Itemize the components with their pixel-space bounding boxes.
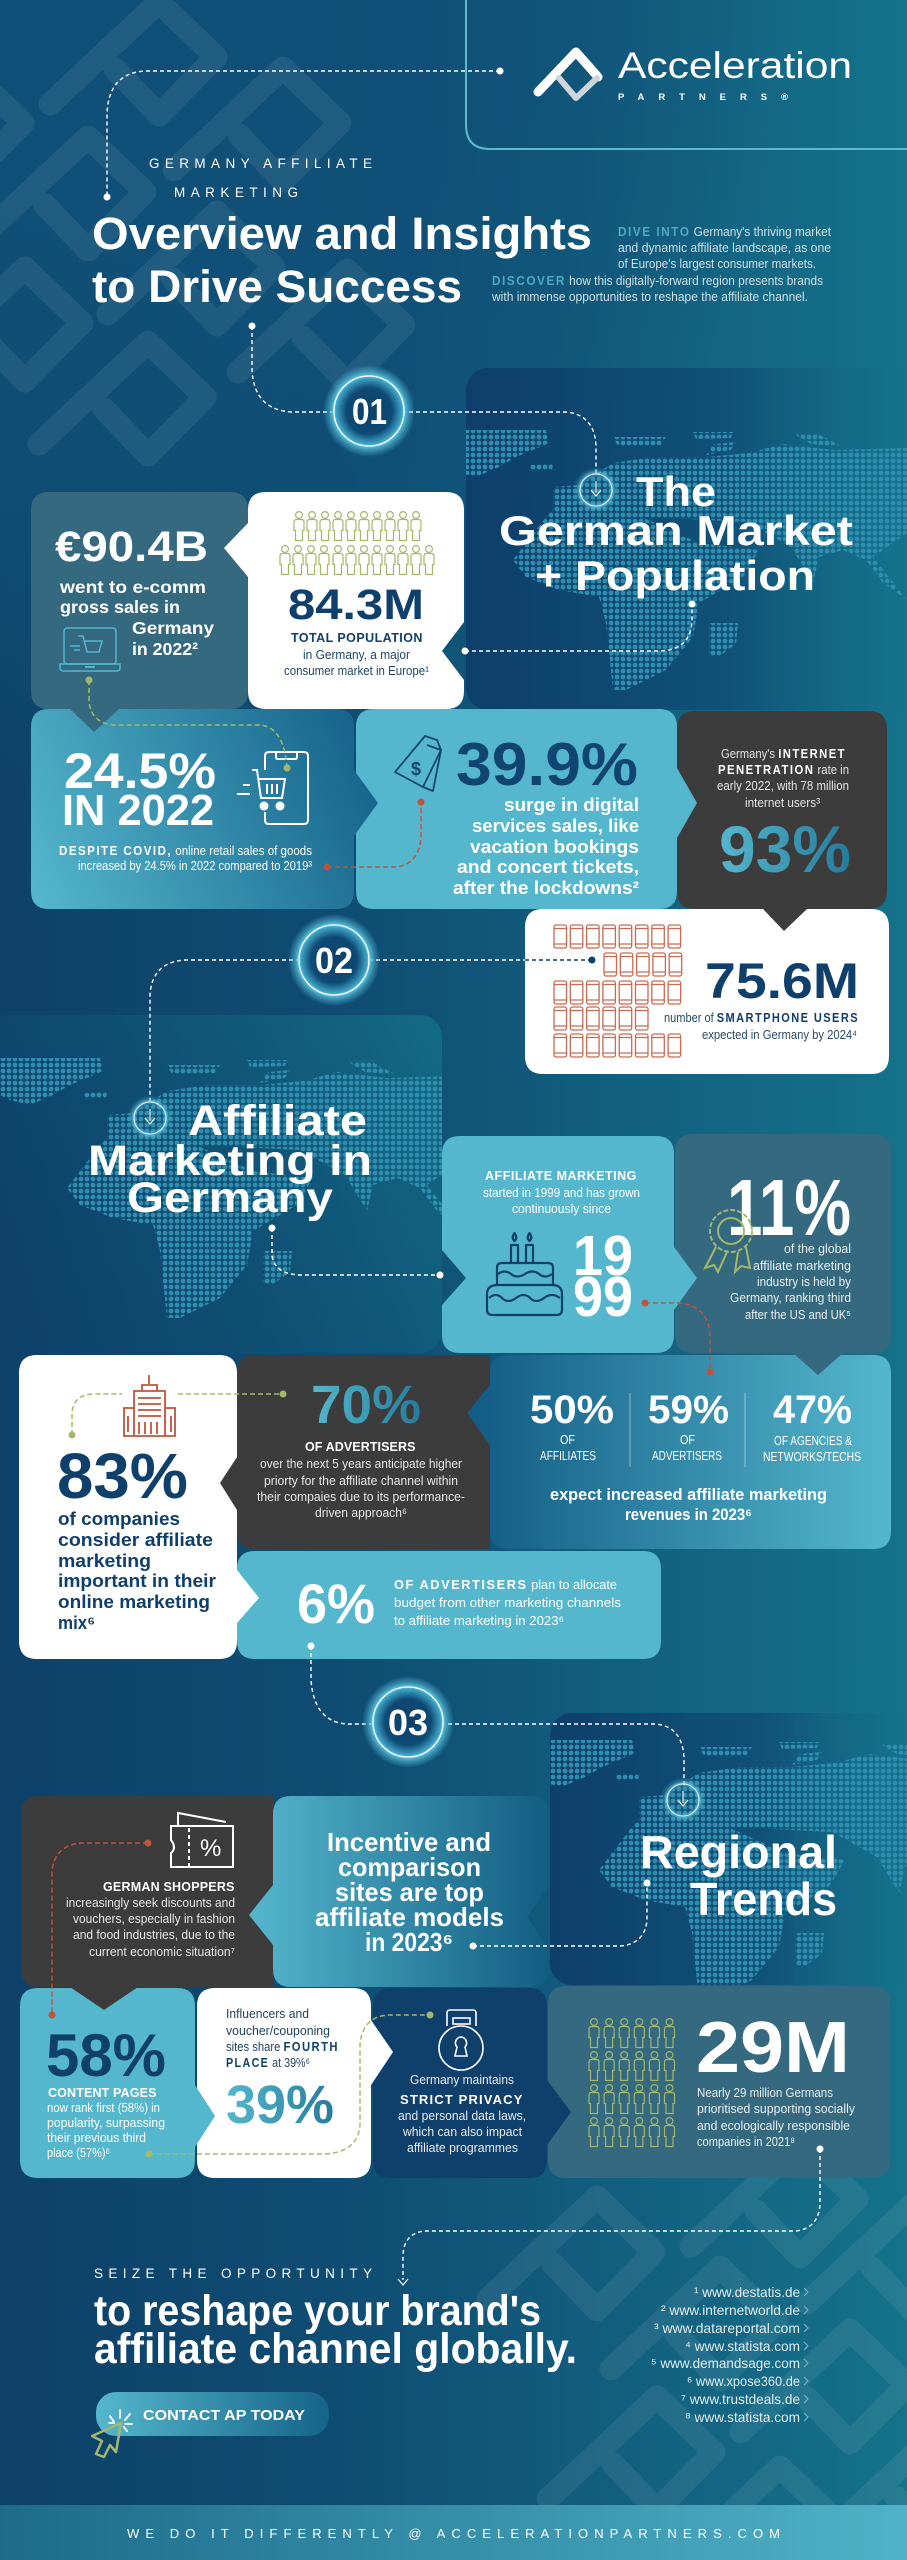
- panel: 50 59 47 percent expectations: [467, 1355, 891, 1549]
- icon: phone with cart: [237, 752, 308, 824]
- panel: 83% of companies: [19, 1355, 259, 1659]
- text: gross sales: Germany: [132, 618, 214, 638]
- icon: click cursor: [92, 2410, 132, 2457]
- stat: 59% of advertisers: 59%: [648, 1388, 729, 1432]
- section number 01: [323, 365, 415, 457]
- panel: influencers 39%: [197, 1988, 393, 2178]
- call to action headline: [94, 2287, 577, 2373]
- stat: 1999: 19: [573, 1224, 633, 1288]
- text: global share: Germany, ranking third: [730, 1291, 851, 1305]
- map panel: section 1: [446, 368, 907, 710]
- section 1 heading: + Population: [535, 552, 815, 599]
- intro text: DIVE INTO Germany's thriving market: [618, 225, 831, 239]
- text: incentive sites are top models: sites are top: [335, 1877, 484, 1907]
- text: content pages: now rank first (58%) in: [47, 2101, 160, 2115]
- text: german shoppers: and food industries, due to the: [73, 1928, 235, 1942]
- section 1 heading: [499, 468, 853, 599]
- text: responsible companies: [697, 2086, 856, 2149]
- stat: 24.5% in 2022: 24.5%: [64, 743, 216, 799]
- text: internet penetration: PENETRATION rate in: [718, 763, 849, 777]
- panel: 24.5% online sales: [31, 709, 378, 909]
- text: german shoppers: increasingly seek discounts and: [66, 1896, 235, 1910]
- icon: grid of smartphones: [554, 925, 682, 1057]
- text: companies consider affiliate: of companies: [58, 1508, 180, 1529]
- stat: 50% of affiliates: [530, 1388, 614, 1463]
- text: started in 1999: AFFILIATE MARKETING: [485, 1169, 638, 1183]
- text: content pages: their previous third: [47, 2131, 146, 2145]
- text: gross sales: in 2022²: [132, 639, 198, 659]
- arrow marker: section 1: [573, 467, 619, 513]
- sources list: ³ www.datareportal.com: [654, 2320, 800, 2336]
- text: surge description: and concert tickets,: [457, 857, 639, 877]
- stat: 58%: 58%: [46, 2022, 166, 2089]
- text: surge description: surge in digital: [504, 795, 639, 815]
- text: influencers and voucher sites: PLACE at 39%⁶: [226, 2056, 310, 2070]
- text: budget allocation: to affiliate marketing in 2023⁶: [394, 1613, 564, 1628]
- stat: 70%: 70%: [311, 1375, 421, 1435]
- text: global share: after the US and UK⁵: [745, 1308, 851, 1322]
- stat: 75.6M: 75.6M: [705, 953, 859, 1009]
- section 2 heading: Germany: [127, 1174, 333, 1222]
- stat: 59% of advertisers: OF: [680, 1433, 695, 1447]
- stat: 59% of advertisers: ADVERTISERS: [652, 1449, 722, 1463]
- section number 03: 03: [388, 1702, 428, 1743]
- stat: 47% of agencies: 47%: [773, 1388, 852, 1432]
- text: advertisers priority: their compaies due to its performance-: [257, 1490, 465, 1504]
- icon: discount voucher: [171, 1813, 233, 1867]
- text: german shoppers: vouchers, especially in fashion: [73, 1912, 235, 1926]
- section 2 heading: [88, 1097, 372, 1222]
- connector: heading to 1999 card: [268, 1224, 444, 1278]
- icon: people pictogram: [589, 2019, 674, 2146]
- text: influencers and voucher sites: Influencers and: [226, 2007, 309, 2021]
- stat: 50% of affiliates: 50%: [530, 1388, 614, 1432]
- panel: affiliate marketing since 1999: [442, 1136, 697, 1353]
- text: budget allocation: budget from other marketing channels: [394, 1595, 622, 1610]
- panel: digital services surge: [356, 709, 697, 909]
- stat: 1999: [573, 1224, 633, 1329]
- stat: 24.5% in 2022: [62, 743, 216, 835]
- section 3 heading: Regional: [640, 1826, 837, 1878]
- text: incentive sites are top models: comparison: [338, 1852, 481, 1882]
- stat: 93%: 93%: [719, 812, 851, 886]
- map panel: section 3: [532, 1713, 907, 2000]
- intro text: of Europe's largest consumer markets.: [618, 257, 816, 271]
- text: advertisers priority: priorty for the affiliate channel within: [264, 1474, 458, 1488]
- text: smartphone users: number of SMARTPHONE USERS: [664, 1011, 859, 1025]
- text: incentive sites are top models: [315, 1827, 504, 1957]
- panel: e-commerce gross sales: [31, 492, 248, 732]
- sources list: ⁴ www.statista.com: [685, 2338, 800, 2354]
- text: internet penetration: [717, 747, 849, 810]
- text: companies consider affiliate: [58, 1508, 216, 1633]
- contact button: [96, 2392, 329, 2436]
- text: german shoppers: GERMAN SHOPPERS: [103, 1880, 236, 1894]
- intro text: [491, 225, 831, 304]
- icon: padlock: [439, 2010, 483, 2070]
- map panel: section 2: [0, 1015, 442, 1352]
- title: to Drive Success: [92, 261, 462, 312]
- section 2 heading: Marketing in: [88, 1137, 372, 1185]
- contact button: CONTACT AP TODAY: [143, 2407, 305, 2424]
- panel: 70% of advertisers: [220, 1355, 490, 1549]
- text: budget allocation: [394, 1577, 622, 1628]
- stat: 39%: 39%: [226, 2075, 334, 2135]
- stat: 6%: 6%: [297, 1572, 375, 1635]
- connector: title to section 1: [248, 322, 596, 476]
- connector: online sales to digital services: [324, 798, 424, 870]
- text: responsible companies: Nearly 29 million Germans: [697, 2086, 833, 2100]
- text: surge description: vacation bookings: [470, 837, 639, 857]
- panel: 6% budget allocation: [237, 1551, 661, 1659]
- text: advertisers priority: driven approach⁶: [315, 1506, 407, 1520]
- stat: 11%: 11%: [727, 1163, 851, 1252]
- sources list: ² www.internetworld.de: [661, 2302, 800, 2318]
- icon: laptop with cart: [60, 628, 120, 671]
- header frame: [466, 0, 907, 149]
- panel: internet penetration: [677, 711, 887, 931]
- text: privacy laws: which can also impact: [402, 2125, 523, 2139]
- text: influencers and voucher sites: [226, 2007, 339, 2070]
- stat: 59% of advertisers: [648, 1388, 729, 1463]
- stat: 50% of affiliates: OF: [560, 1433, 575, 1447]
- text: started in 1999: [483, 1169, 640, 1216]
- text: expect increased revenues: [550, 1485, 827, 1524]
- text: budget allocation: OF ADVERTISERS plan to allocate: [394, 1577, 617, 1592]
- stat: 47% of agencies: [763, 1388, 861, 1464]
- text: online retail sales: [59, 844, 312, 873]
- text: companies consider affiliate: online marketing: [58, 1591, 210, 1612]
- stat: 47% of agencies: NETWORKS/TECHS: [763, 1450, 861, 1464]
- text: influencers and voucher sites: voucher/couponing: [226, 2024, 330, 2038]
- heading eyebrow: GERMANY AFFILIATE: [149, 156, 372, 171]
- text: incentive sites are top models: affiliate models: [315, 1902, 504, 1932]
- text: content pages: CONTENT PAGES: [48, 2086, 158, 2100]
- text: companies consider affiliate: important in their: [58, 1570, 216, 1591]
- text: gross sales: [59, 577, 214, 659]
- stat: 1999: 99: [573, 1265, 633, 1329]
- logo: Acceleration Partners: [538, 45, 852, 103]
- text: privacy laws: STRICT PRIVACY: [400, 2092, 524, 2107]
- text: incentive sites are top models: in 2023⁶: [365, 1927, 453, 1957]
- arrow marker: section 2: [127, 1095, 173, 1141]
- text: online retail sales: DESPITE COVID, online retail sales of goods: [59, 844, 312, 858]
- icon: birthday cake: [487, 1233, 562, 1315]
- connector: 83% to 70%: [68, 1390, 286, 1438]
- connector: shoppers to content pages: [48, 1840, 152, 2018]
- text: content pages: popularity, surpassing: [47, 2116, 165, 2130]
- section number 02: [288, 914, 380, 1006]
- text: companies consider affiliate: consider affiliate: [58, 1529, 213, 1550]
- sources list: ⁵ www.demandsage.com: [651, 2355, 800, 2371]
- connector: incentive to regional heading: [470, 1880, 650, 1950]
- connector: 29M to call to action: [398, 2146, 824, 2285]
- call to action eyebrow: SEIZE THE OPPORTUNITY: [94, 2266, 372, 2281]
- text: total population: [284, 631, 429, 678]
- text: global share: industry is held by: [757, 1275, 852, 1289]
- text: started in 1999: started in 1999 and has grown: [483, 1186, 640, 1200]
- panel: content pages 58%: [20, 1988, 215, 2178]
- footer band: [0, 2505, 907, 2560]
- stat: 24.5% in 2022: IN 2022: [62, 786, 214, 835]
- text: content pages: [47, 2086, 165, 2160]
- text: german shoppers: current economic situation⁷: [89, 1945, 235, 1959]
- text: online retail sales: increased by 24.5% in 2022 compared to 2019³: [78, 859, 312, 873]
- call to action headline: affiliate channel globally.: [94, 2325, 577, 2373]
- text: advertisers priority: over the next 5 years anticipate higher: [260, 1457, 462, 1471]
- text: internet penetration: internet users³: [745, 796, 820, 810]
- text: expect increased revenues: expect increased affiliate marketing: [550, 1485, 827, 1504]
- text: privacy laws: [398, 2073, 526, 2155]
- connector: logo to heading: [104, 68, 504, 200]
- text: expect increased revenues: revenues in 2023⁶: [625, 1505, 752, 1524]
- text: advertisers priority: [257, 1440, 465, 1520]
- stat: 83%: 83%: [57, 1440, 188, 1512]
- section number 02: 02: [315, 940, 353, 981]
- section 1 heading: The: [636, 468, 716, 515]
- sources list: ⁶ www.xpose360.de: [687, 2373, 800, 2389]
- text: responsible companies: and ecologically responsible: [697, 2119, 850, 2133]
- text: total population: TOTAL POPULATION: [291, 631, 424, 645]
- text: advertisers priority: OF ADVERTISERS: [305, 1440, 417, 1454]
- panel: incentive and comparison sites: [249, 1796, 549, 1987]
- title: [92, 208, 592, 312]
- sources list: ¹ www.destatis.de: [694, 2284, 800, 2300]
- text: gross sales: went to e-comm: [59, 577, 206, 597]
- text: german shoppers: [66, 1880, 236, 1959]
- text: influencers and voucher sites: sites share FOURTH: [226, 2040, 339, 2054]
- section 3 heading: Trends: [690, 1873, 837, 1925]
- stat: 84.3M: 84.3M: [288, 581, 424, 629]
- icon: office building: [124, 1375, 175, 1436]
- text: surge description: services sales, like: [472, 816, 639, 836]
- arrow marker: section 3: [660, 1777, 706, 1823]
- text: global share: [730, 1242, 852, 1322]
- title: Overview and Insights: [92, 208, 592, 259]
- icon: population pictogram: [280, 512, 434, 574]
- sources list: ⁷ www.trustdeals.de: [681, 2391, 800, 2407]
- panel: 11% global share: [675, 1134, 891, 1375]
- text: smartphone users: [664, 1011, 859, 1042]
- section number 03: [362, 1676, 454, 1768]
- section 3 heading: [640, 1826, 837, 1925]
- panel: smartphone users: [525, 909, 889, 1074]
- footer band: WE DO IT DIFFERENTLY @ ACCELERATIONPARTNERS.COM: [127, 2526, 780, 2541]
- icon: award ribbon: [705, 1210, 752, 1272]
- call to action headline: to reshape your brand's: [94, 2287, 541, 2335]
- text: internet penetration: early 2022, with 78 million: [717, 779, 849, 793]
- text: total population: in Germany, a major: [303, 648, 410, 662]
- text: privacy laws: affiliate programmes: [407, 2141, 518, 2155]
- intro text: DISCOVER how this digitally-forward region presents brands: [492, 274, 823, 288]
- text: smartphone users: expected in Germany by 2024⁴: [702, 1028, 857, 1042]
- section number 01: 01: [352, 391, 387, 432]
- panel: 29M responsible companies: [548, 1986, 890, 2178]
- text: started in 1999: continuously since: [512, 1202, 611, 1216]
- panel: german shoppers: [21, 1796, 273, 2010]
- text: privacy laws: and personal data laws,: [398, 2109, 526, 2123]
- stat: 50% of affiliates: AFFILIATES: [540, 1449, 596, 1463]
- text: responsible companies: companies in 2021⁸: [697, 2135, 795, 2149]
- icon: discount voucher: %: [200, 1835, 221, 1862]
- panel: strict privacy: [373, 1988, 571, 2178]
- text: responsible companies: prioritised supporting socially: [697, 2102, 856, 2116]
- text: total population: consumer market in Europe¹: [284, 664, 429, 678]
- text: surge description: after the lockdowns²: [453, 878, 639, 898]
- sources list: ⁸ www.statista.com: [685, 2409, 800, 2425]
- connector: section 2: [150, 956, 596, 1104]
- text: companies consider affiliate: marketing: [58, 1550, 151, 1571]
- text: companies consider affiliate: mix⁶: [58, 1612, 95, 1633]
- intro text: with immense opportunities to reshape the affiliate channel.: [491, 290, 808, 304]
- stat: 29M: 29M: [696, 2008, 850, 2088]
- panel: total population: [224, 492, 464, 709]
- section 1 heading: German Market: [499, 507, 853, 554]
- heading eyebrow: MARKETING: [174, 185, 298, 200]
- section 2 heading: Affiliate: [188, 1097, 367, 1145]
- text: internet penetration: Germany's INTERNET: [721, 747, 846, 761]
- logo: Acceleration Partners: Acceleration: [618, 45, 852, 86]
- connector: 1999 to expectations: [642, 1300, 714, 1376]
- stat: 47% of agencies: OF AGENCIES &: [774, 1434, 853, 1448]
- text: surge description: [453, 795, 639, 898]
- stat: 39.9%: 39.9%: [456, 731, 638, 798]
- text: privacy laws: Germany maintains: [410, 2073, 514, 2087]
- text: gross sales: gross sales in: [60, 597, 180, 617]
- intro text: and dynamic affiliate landscape, as one: [618, 241, 831, 255]
- connector: section 3: [308, 1642, 684, 1786]
- text: content pages: place (57%)⁶: [47, 2146, 110, 2160]
- icon: price tag: [395, 736, 441, 791]
- icon: price tag: $: [411, 759, 421, 779]
- connector: e-comm to online sales: [86, 676, 290, 772]
- sources list: [651, 2284, 808, 2425]
- heading eyebrow: [149, 156, 372, 200]
- stat: €90.4B: €90.4B: [55, 523, 208, 571]
- text: incentive sites are top models: Incentive and: [327, 1827, 491, 1857]
- connector: content pages to privacy: [146, 2012, 434, 2158]
- text: global share: of the global: [784, 1242, 851, 1256]
- logo: Acceleration Partners: PARTNERS®: [618, 92, 788, 103]
- text: global share: affiliate marketing: [753, 1259, 851, 1273]
- connector: heading to population: [462, 600, 696, 654]
